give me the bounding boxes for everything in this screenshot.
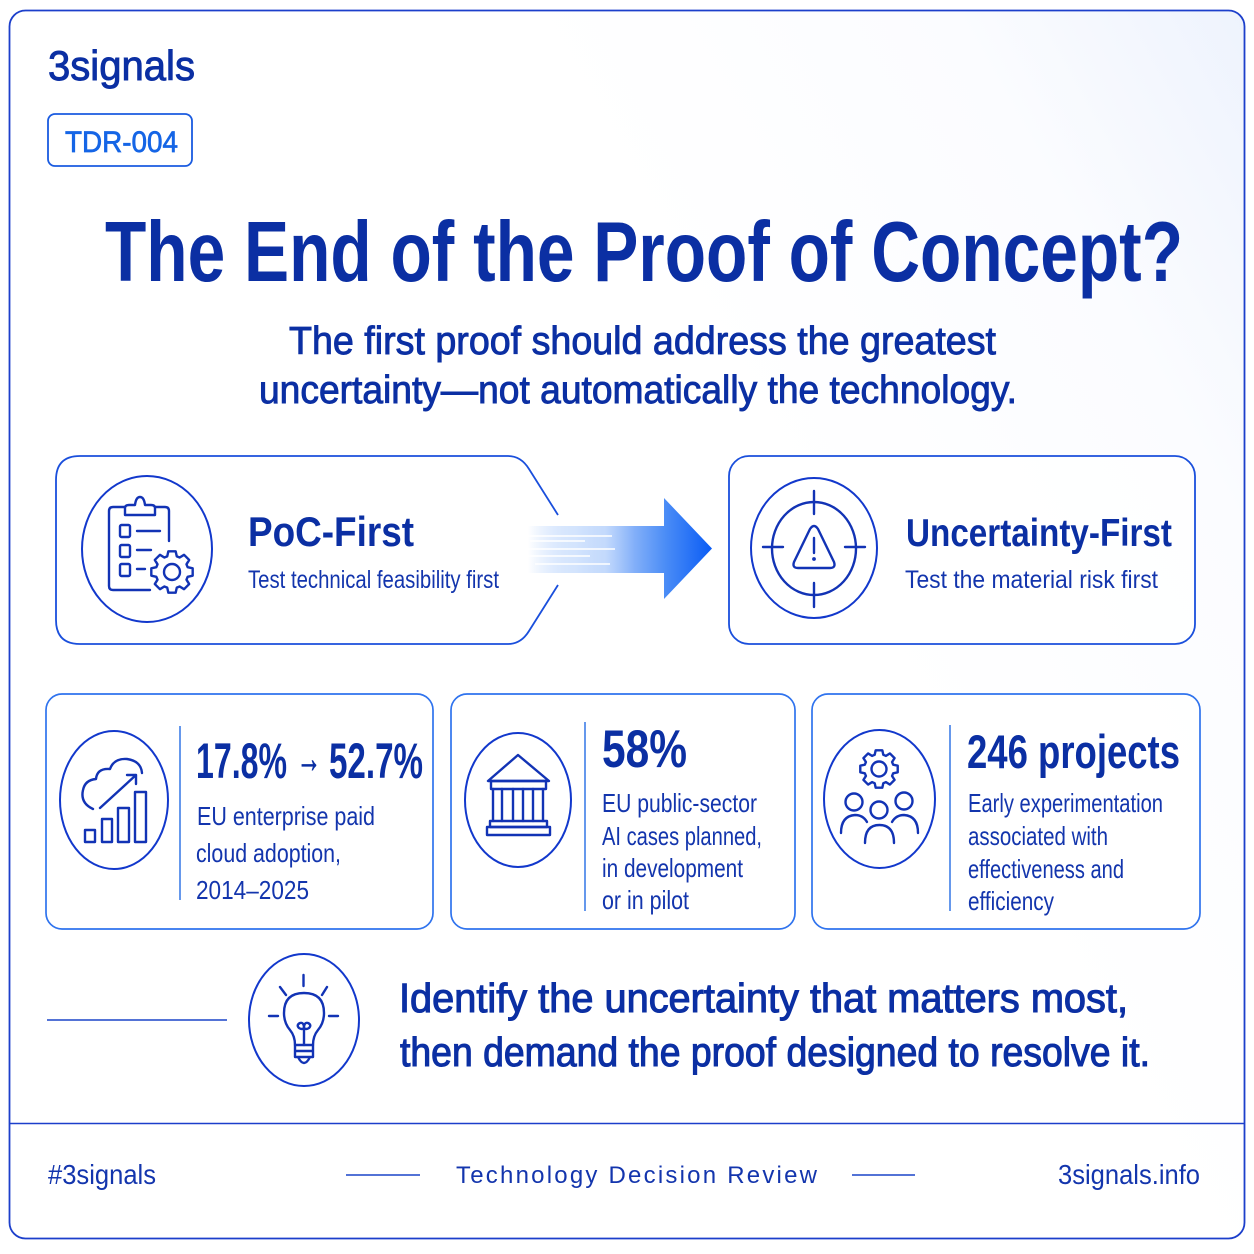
stat: 17.8% to 52.7%: 17.8%: [196, 733, 287, 789]
text: projects description: efficiency: [968, 886, 1054, 916]
panel: public sector stat: [451, 694, 795, 929]
text: public sector description: EU public-sector: [602, 788, 757, 818]
footer: website: 3signals.info: [1058, 1159, 1200, 1190]
text: public sector description: AI cases planned,: [602, 821, 762, 851]
panel: PoC-First: [56, 456, 558, 644]
footer: publication name: Technology Decision Review: [456, 1162, 818, 1189]
icon: government building: [465, 733, 571, 867]
badge: TDR-004: [48, 114, 192, 166]
subtitle: [259, 320, 1017, 412]
text: projects description: effectiveness and: [968, 854, 1124, 884]
key takeaway: then demand the proof designed to resolve it.: [400, 1029, 1150, 1075]
text: projects description: associated with: [968, 821, 1108, 851]
text: cloud adoption description: 2014–2025: [196, 875, 309, 905]
text: projects description: Early experimentation: [968, 788, 1163, 818]
arrow: [525, 498, 712, 599]
subtitle: uncertainty—not automatically the technology.: [259, 369, 1017, 412]
stat: 246 projects: 246 projects: [967, 725, 1180, 778]
text: PoC-First description: Test technical feasibility first: [248, 566, 499, 594]
key takeaway: [399, 975, 1150, 1075]
stat: 58%: 58%: [602, 720, 687, 779]
panel: 246 projects stat: [812, 694, 1200, 929]
icon: lightbulb: [249, 954, 359, 1086]
text: public sector description: in development: [602, 853, 744, 883]
text: public sector description: [602, 788, 762, 915]
text: Uncertainty-First description: Test the material risk first: [905, 566, 1158, 594]
icon: team and gear: [824, 730, 935, 868]
footer: hashtag: #3signals: [48, 1159, 156, 1190]
text: cloud adoption description: [196, 801, 375, 905]
heading: PoC-First: PoC-First: [248, 508, 414, 555]
icon: target with warning triangle: [751, 478, 877, 618]
key takeaway: Identify the uncertainty that matters most,: [399, 975, 1128, 1021]
text: public sector description: or in pilot: [602, 885, 690, 915]
text: cloud adoption description: cloud adoption,: [196, 838, 341, 868]
brand name: 3signals: [48, 42, 195, 89]
text: cloud adoption description: EU enterprise paid: [197, 801, 375, 831]
stat: 17.8% to 52.7%: 52.7%: [329, 733, 423, 789]
panel: Uncertainty-First: [729, 456, 1195, 644]
stat: 17.8% to 52.7%: [196, 733, 423, 789]
text: projects description: [968, 788, 1163, 916]
stat: 17.8% to 52.7%: →: [297, 737, 321, 781]
subtitle: The first proof should address the greatest: [289, 320, 996, 363]
heading: Uncertainty-First: Uncertainty-First: [906, 512, 1172, 555]
badge: TDR-004: TDR-004: [65, 126, 178, 159]
panel: cloud adoption stat: [46, 694, 433, 929]
icon: clipboard with gear: [82, 476, 212, 622]
icon: cloud and rising bars: [60, 731, 168, 869]
